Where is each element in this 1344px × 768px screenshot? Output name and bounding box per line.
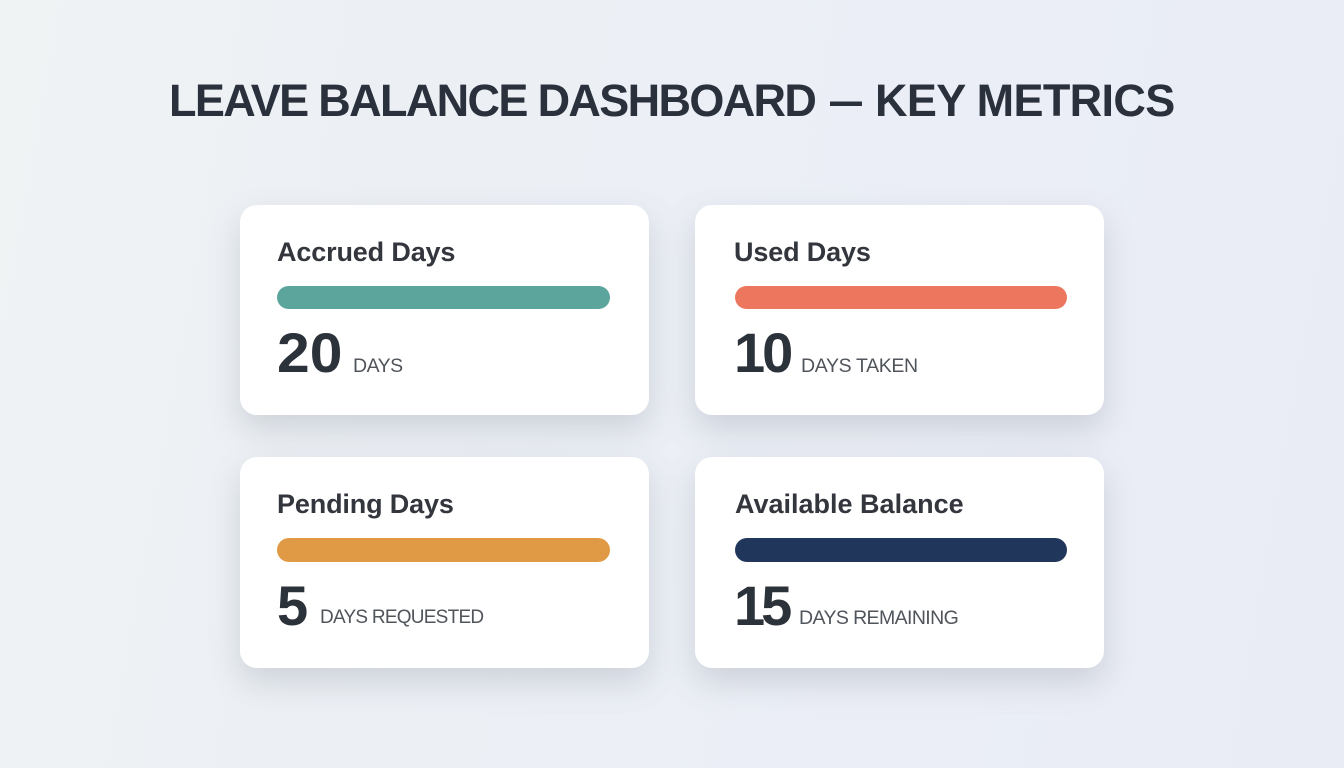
bar: used (735, 286, 1067, 309)
unit: days taken: DAYS TAKEN (801, 355, 918, 377)
unit: days remaining: DAYS REMAINING (799, 607, 958, 629)
bar: available (735, 538, 1067, 562)
panel: pending days (240, 457, 649, 668)
heading: available balance: Available Balance (735, 488, 964, 518)
panel: available balance (695, 457, 1104, 668)
bar: accrued (277, 286, 610, 309)
title: — (830, 75, 862, 126)
unit: days requested: DAYS REQUESTED (320, 607, 483, 628)
panel: accrued days (240, 205, 649, 415)
title (169, 75, 1175, 126)
value: 10: 10 (734, 321, 790, 384)
heading: pending days: Pending Days (277, 488, 454, 518)
title: KEY METRICS (875, 75, 1175, 126)
unit: days: DAYS (353, 355, 403, 377)
title: LEAVE BALANCE DASHBOARD (169, 75, 815, 126)
heading: used days: Used Days (734, 236, 871, 266)
value: 15: 15 (734, 574, 788, 636)
panel: used days (695, 205, 1104, 415)
value: 5: 5 (277, 574, 308, 636)
heading: accrued days: Accrued Days (277, 236, 455, 266)
bar: pending (277, 538, 610, 562)
value: 20: 20 (277, 321, 342, 384)
